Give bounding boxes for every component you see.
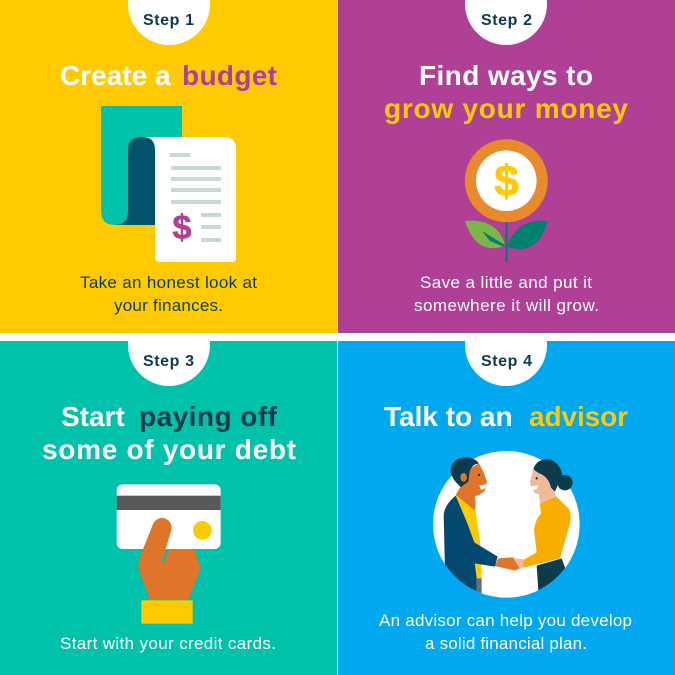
icon: money flower — [465, 139, 548, 262]
heading: start paying off some of your debt: paying off — [139, 401, 278, 432]
icon: money flower: $ — [494, 157, 519, 206]
text: an advisor can help: An advisor can help you develop — [379, 611, 632, 630]
step 2 badge — [465, 0, 547, 45]
illustration: advisor handshake — [433, 451, 580, 598]
heading: start paying off some of your debt: Start — [61, 401, 133, 432]
heading: create a budget: Create a — [60, 60, 178, 91]
heading: create a budget: budget — [182, 60, 277, 91]
step 3 badge: Step 3 — [143, 353, 194, 370]
icon: hand holding credit card — [117, 484, 221, 624]
step 4 badge: Step 4 — [481, 353, 532, 370]
step 4 badge — [465, 341, 547, 386]
step 1 badge — [128, 0, 210, 45]
heading: talk to an advisor: advisor — [529, 401, 628, 432]
step 1 badge: Step 1 — [143, 12, 194, 29]
heading: start paying off some of your debt: some of your debt — [42, 434, 296, 465]
icon: budget document: $ — [173, 209, 192, 247]
heading: talk to an advisor: Talk to an — [384, 401, 520, 432]
panel: step 2 grow your money — [338, 0, 675, 333]
panel: step 3 pay off debt — [0, 304, 337, 675]
text: start with your credit cards: Start with your credit cards. — [60, 634, 276, 653]
step 2 badge: Step 2 — [481, 12, 532, 29]
icon: budget document — [101, 106, 236, 262]
text: save a little: somewhere it will grow. — [414, 296, 599, 315]
text: take an honest look: your finances. — [114, 296, 223, 315]
text: save a little: Save a little and put it — [420, 273, 592, 292]
text: an advisor can help: a solid financial plan. — [425, 634, 587, 653]
panel: step 4 talk to an advisor — [338, 304, 675, 675]
panel: step 1 create a budget — [0, 0, 337, 333]
text: take an honest look: Take an honest look at — [80, 273, 257, 292]
heading: find ways to grow your money: grow your money — [384, 93, 628, 124]
heading: find ways to grow your money: Find ways to — [419, 60, 593, 91]
step 3 badge — [128, 341, 210, 386]
